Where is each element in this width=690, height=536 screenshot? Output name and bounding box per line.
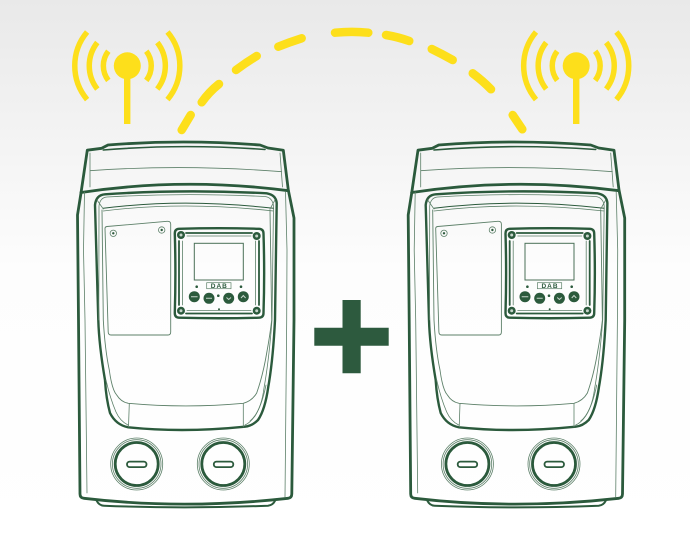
- left knob: [441, 438, 493, 490]
- front window panel: [95, 191, 277, 430]
- control buttons: [520, 291, 580, 304]
- DAB logo: DAB: [211, 283, 228, 290]
- icon: left wireless antenna: [75, 32, 180, 124]
- right knob: [197, 438, 249, 490]
- pump housing outline: [408, 142, 625, 507]
- indicator lights: [195, 285, 242, 310]
- control display module: [506, 228, 595, 318]
- left knob: [111, 438, 163, 490]
- pump housing outline: [78, 142, 294, 507]
- icon: right wireless antenna: [524, 32, 629, 124]
- display screen: [525, 243, 574, 280]
- cover plate with screws: [105, 221, 171, 335]
- control buttons: [189, 291, 249, 304]
- cover plate with screws: [436, 221, 501, 335]
- DAB logo: DAB: [541, 283, 559, 290]
- panel: right pump: [408, 142, 625, 507]
- panel: left pump: [78, 142, 294, 507]
- control display module: [175, 228, 264, 318]
- indicator lights: [526, 285, 573, 310]
- right knob: [528, 438, 580, 490]
- display screen: [194, 243, 243, 280]
- arrow: dashed wireless link arc: [182, 32, 522, 130]
- icon: plus sign: [314, 300, 389, 373]
- front window panel: [426, 191, 607, 430]
